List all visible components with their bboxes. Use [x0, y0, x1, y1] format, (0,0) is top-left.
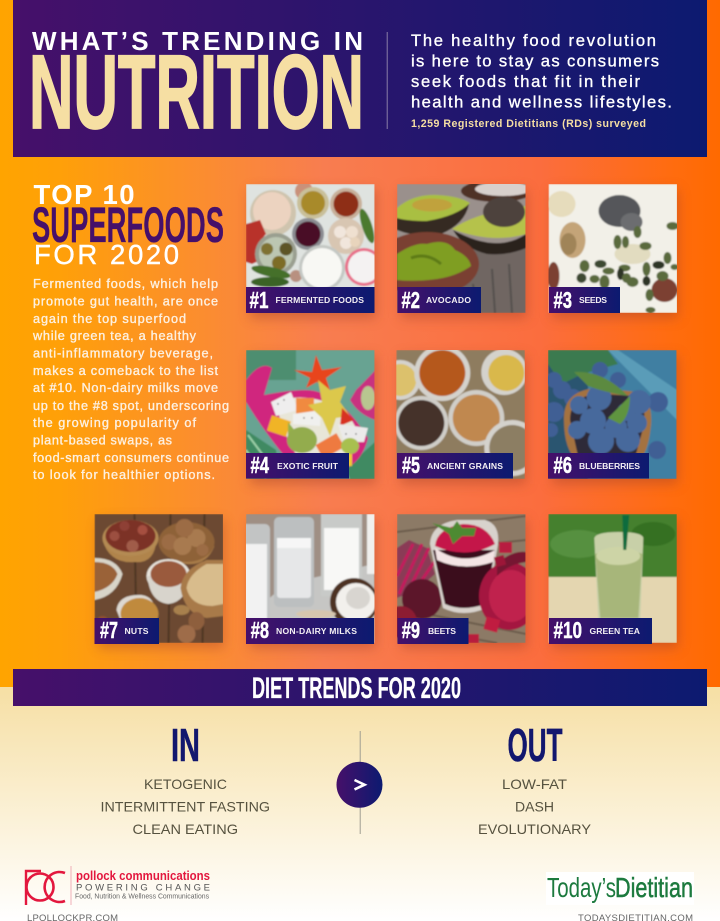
label: #2 avocado — [398, 287, 481, 313]
label: #2 avocado: #2 — [402, 287, 420, 313]
background: cream lower area — [0, 687, 720, 921]
text block: superfoods description: promote gut health, are once — [33, 294, 218, 308]
label: #7 nuts: #7 — [100, 617, 118, 643]
panel: #9 beets — [385, 514, 539, 648]
label: #6 blueberries — [548, 452, 649, 478]
text block: superfoods description: while green tea, a healthy — [32, 329, 197, 343]
text block: superfoods description: at #10. Non-dairy milks move — [33, 381, 218, 395]
icon: circle chevron — [336, 762, 382, 808]
panel: #6 blueberries — [544, 350, 678, 484]
label: #9 beets: #9 — [402, 617, 420, 643]
label: #4 exotic fruit — [246, 452, 349, 478]
label: #1 fermented foods — [246, 287, 374, 313]
text block: superfoods description — [32, 277, 229, 482]
label: #8 non-dairy milks: #8 — [251, 617, 269, 643]
panel: #4 exotic fruit — [246, 350, 376, 484]
logo: pollock communications: pollock communications — [76, 868, 210, 883]
panel: out column: LOW-FAT — [502, 776, 567, 792]
panel: out column: DASH — [515, 798, 554, 814]
label: #6 blueberries: #6 — [554, 452, 572, 478]
logo: pollock communications: Food, Nutrition & Wellness Communications — [75, 892, 209, 900]
text block: superfoods description: food-smart consumers continue — [33, 451, 229, 465]
label: #3 seeds: #3 — [554, 287, 572, 313]
text block: header description: is here to stay as consumers — [411, 52, 659, 70]
label: #1 fermented foods: FERMENTED FOODS — [276, 295, 364, 305]
panel: #8 non-dairy milks — [240, 514, 378, 648]
logo: today's dietitian — [546, 872, 694, 905]
label: #4 exotic fruit: #4 — [250, 452, 269, 478]
text block: header description: seek foods that fit in their — [411, 72, 640, 91]
panel: in column: KETOGENIC — [144, 776, 227, 792]
heading: top 10 superfoods for 2020: FOR 2020 — [34, 239, 179, 270]
panel: #5 ancient grains — [395, 350, 531, 489]
heading: top 10 superfoods for 2020: TOP 10 — [34, 179, 134, 210]
logo: pollock communications: POWERING CHANGE — [76, 882, 210, 894]
label: #4 exotic fruit: EXOTIC FRUIT — [277, 461, 339, 471]
text block: superfoods description: plant-based swaps, as — [33, 434, 172, 448]
label: #6 blueberries: BLUEBERRIES — [579, 461, 640, 471]
logo: today's dietitian: Dietitian — [615, 872, 693, 903]
text block: superfoods description: again the top superfood — [33, 312, 186, 326]
panel: #2 avocado — [396, 184, 532, 323]
text block: superfoods description: Fermented foods, which help — [33, 277, 218, 291]
label: #9 beets — [398, 617, 468, 644]
label: #10 green tea: #10 — [554, 617, 582, 643]
text block: superfoods description: to look for healthier options. — [33, 468, 215, 482]
label: #5 ancient grains: ANCIENT GRAINS — [427, 461, 503, 471]
label: #10 green tea: GREEN TEA — [590, 626, 640, 636]
panel: out column: EVOLUTIONARY — [478, 821, 592, 837]
panel: in column: INTERMITTENT FASTING — [100, 798, 270, 814]
label: #2 avocado: AVOCADO — [426, 295, 471, 305]
logo: today's dietitian: Today’s — [547, 872, 616, 903]
label: #7 nuts — [94, 617, 159, 644]
panel: #10 green tea — [548, 514, 678, 648]
panel: #7 nuts — [94, 514, 224, 648]
background: orange upper area — [0, 0, 720, 688]
text block: superfoods description: the growing popularity of — [33, 416, 196, 430]
panel: out column — [478, 719, 592, 837]
text block: superfoods description: anti-inflammatory beverage, — [33, 346, 213, 360]
label: #8 non-dairy milks — [246, 617, 374, 644]
label: #8 non-dairy milks: NON-DAIRY MILKS — [276, 626, 357, 636]
panel: #3 seeds — [548, 184, 678, 318]
text block: header description: The healthy food revolution — [411, 31, 656, 50]
heading: in: IN — [171, 719, 200, 771]
text block: header description: health and wellness lifestyles. — [411, 92, 672, 112]
heading: top 10 superfoods for 2020: SUPERFOODS — [32, 197, 224, 253]
label: #1 fermented foods: #1 — [250, 287, 269, 313]
label: #3 seeds — [549, 287, 620, 313]
label: #7 nuts: NUTS — [124, 626, 149, 636]
text block: header description — [411, 31, 672, 112]
heading: out: OUT — [508, 719, 562, 771]
label: #3 seeds: SEEDS — [579, 295, 607, 305]
icon: pc monogram — [26, 871, 65, 905]
text block: superfoods description: makes a comeback to the list — [33, 364, 218, 378]
heading: what's trending in: WHAT’S TRENDING IN — [32, 26, 363, 56]
label: #5 ancient grains — [397, 452, 513, 478]
heading: nutrition: NUTRITION — [29, 34, 364, 151]
panel: header banner — [13, 0, 707, 157]
text block: superfoods description: up to the #8 spot, underscoring — [33, 399, 229, 413]
logo: pollock communications — [26, 866, 210, 905]
panel: diet trends banner: DIET TRENDS FOR 2020 — [252, 672, 461, 705]
label: #9 beets: BEETS — [428, 626, 456, 636]
heading: top 10 superfoods for 2020 — [32, 179, 224, 270]
text block: survey note: 1,259 Registered Dietitians (RDs) surveyed — [411, 118, 646, 130]
panel: #1 fermented foods — [246, 182, 383, 318]
label: #10 green tea — [549, 617, 652, 644]
label: #5 ancient grains: #5 — [402, 452, 420, 478]
panel: in column — [100, 719, 270, 837]
panel: diet trends banner — [13, 669, 707, 706]
panel: in column: CLEAN EATING — [132, 821, 238, 837]
